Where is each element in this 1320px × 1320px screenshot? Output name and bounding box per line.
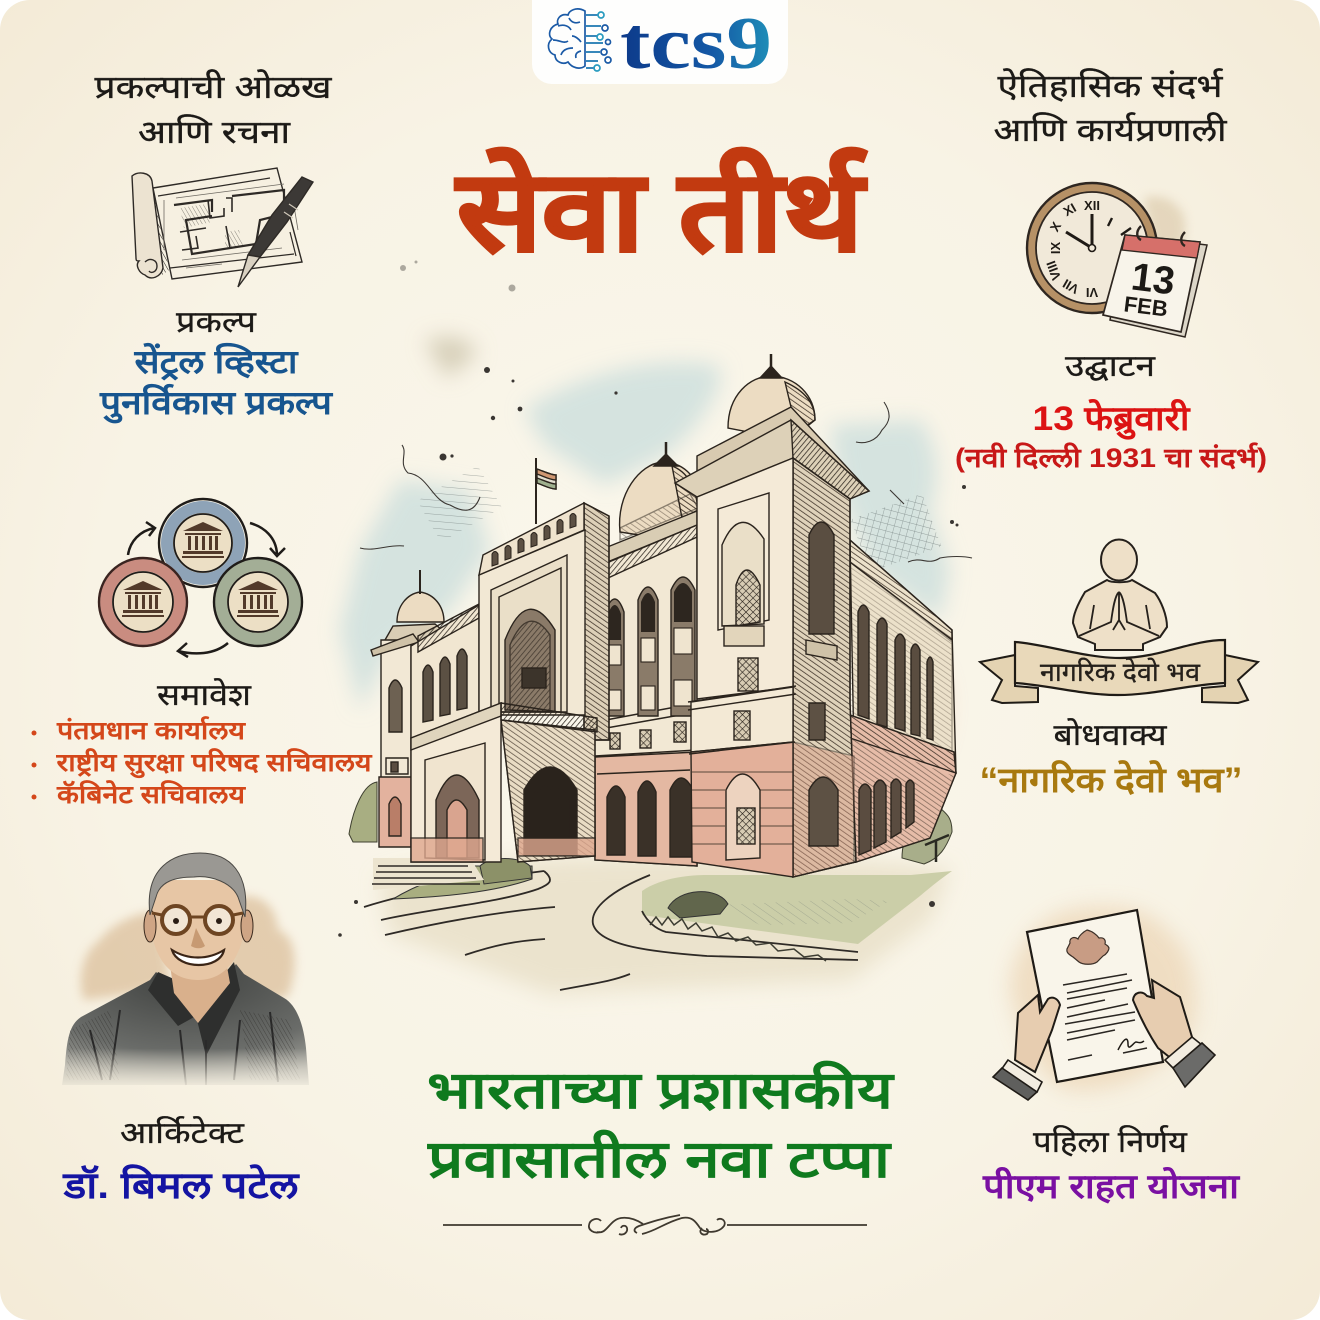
- main right tower: [675, 354, 869, 877]
- back dome: [620, 442, 698, 540]
- heading: project identity: प्रकल्पाची ओळख: [94, 69, 332, 105]
- middle section: [588, 511, 697, 866]
- label: first decision: पहिला निर्णय: [1033, 1125, 1188, 1159]
- bullet list: कॅबिनेट सचिवालय: [56, 780, 247, 809]
- icon: clock and calendar: VIII: [1043, 259, 1064, 282]
- ground and drive: [364, 858, 952, 990]
- heading: project identity: [94, 69, 332, 150]
- heading: project identity: आणि रचना: [138, 114, 291, 150]
- label: motto: बोधवाक्य: [1054, 718, 1167, 752]
- portrait: Dr Bimal Patel: [62, 853, 309, 1085]
- sky hatching: [417, 466, 502, 542]
- heading: history: आणि कार्यप्रणाली: [994, 112, 1227, 148]
- closing tagline: [427, 1060, 895, 1189]
- value: motto: “नागरिक देवो भव”: [980, 760, 1242, 800]
- central block: [479, 458, 609, 740]
- label: architect: आर्किटेक्ट: [120, 1116, 245, 1150]
- icon: three linked rings: [99, 499, 302, 657]
- value: central vista redevelopment: पुनर्विकास प्रकल्प: [99, 383, 333, 424]
- panel: architect: [62, 853, 309, 1206]
- value: date: 13 फेब्रुवारी: [1032, 398, 1191, 440]
- value: name: डॉ. बिमल पटेल: [62, 1164, 300, 1206]
- value: date context: (नवी दिल्ली 1931 चा संदर्भ): [955, 442, 1267, 473]
- bullet list: [32, 716, 373, 809]
- panel: history: [955, 68, 1267, 473]
- icon: clock and calendar: VI: [1086, 285, 1098, 300]
- small left tower: [371, 570, 451, 847]
- label: project: प्रकल्प: [176, 306, 257, 339]
- label: inauguration: उद्घाटन: [1065, 350, 1157, 383]
- trees: [349, 782, 377, 842]
- heading: history: ऐतिहासिक संदर्भ: [998, 68, 1224, 104]
- closing tagline: भारताच्या प्रशासकीय: [427, 1060, 895, 1120]
- icon: clock and calendar: FEB: [1122, 291, 1169, 322]
- icon: clock and calendar: XI: [1061, 200, 1079, 219]
- icon: brain circuit: [548, 9, 611, 71]
- panel: project identity: [94, 69, 333, 424]
- watercolor wash: [340, 337, 950, 994]
- value: central vista redevelopment: [99, 342, 333, 424]
- icon: clock and calendar: X: [1047, 219, 1064, 234]
- ribbon text: नागरिक देवो भव: [1040, 657, 1201, 687]
- panel: first decision: [982, 906, 1240, 1206]
- value: central vista redevelopment: सेंट्रल व्हिस्टा: [133, 342, 299, 381]
- value: scheme: पीएम राहत योजना: [982, 1166, 1240, 1206]
- icon: clock and calendar: [1027, 183, 1207, 337]
- icon: document in hands: [993, 906, 1215, 1100]
- icon: namaste figure with ribbon: [980, 540, 1258, 703]
- heading: inclusion: समावेश: [157, 678, 252, 712]
- icon: clock and calendar: XII: [1084, 198, 1100, 213]
- logo wordmark: tcs9: [620, 3, 772, 85]
- icon: clock and calendar: VII: [1060, 276, 1081, 297]
- right wing: [850, 540, 956, 862]
- icon: blueprint and pen: [132, 168, 313, 287]
- icon: clock and calendar: IX: [1048, 242, 1063, 254]
- left wing: [411, 604, 479, 738]
- bullet list: पंतप्रधान कार्यालय: [56, 716, 247, 745]
- porch: [411, 703, 597, 862]
- panel: included offices: [32, 499, 373, 809]
- panel: motto: [980, 540, 1258, 800]
- ornament: [443, 1215, 867, 1235]
- heading: history: [994, 68, 1227, 148]
- ink splatter: [338, 260, 966, 937]
- closing tagline: प्रवासातील नवा टप्पा: [427, 1129, 893, 1189]
- title: सेवा तीर्थ: [455, 147, 867, 274]
- bullet list: राष्ट्रीय सुरक्षा परिषद सचिवालय: [55, 748, 373, 779]
- logo: tcs9: [532, 0, 788, 85]
- illustration: Seva Teerth building: [338, 260, 972, 994]
- icon: clock and calendar: 13: [1129, 256, 1177, 303]
